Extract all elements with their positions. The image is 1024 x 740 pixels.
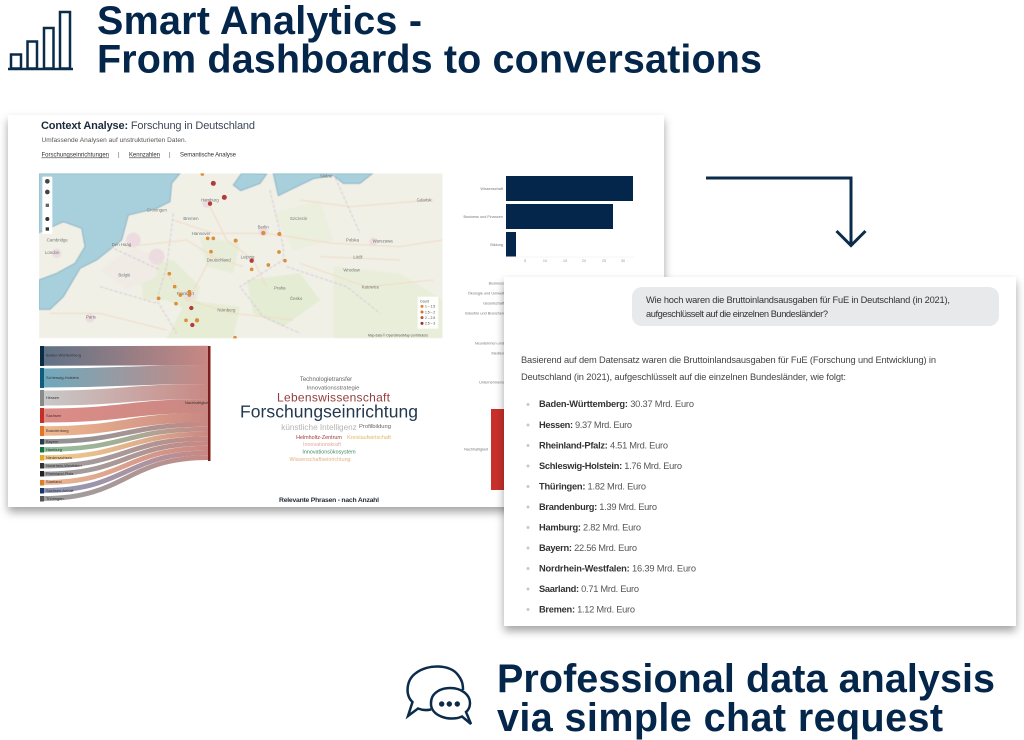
chat question bubble: Wie hoch waren die Bruttoinlandsausgaben für FuE in Deutschland (in 2021), <box>646 295 950 305</box>
word cloud: Helmholtz-Zentrum <box>296 435 342 441</box>
word cloud: Wissenschaftseinrichtung <box>289 457 351 463</box>
map labels: Nürnberg <box>217 308 236 313</box>
bar chart: lower, partly hidden: Neuntehmen und <box>475 342 504 346</box>
icon: chat bubbles <box>408 666 471 724</box>
map legend: 2 – 2.5 <box>425 316 435 320</box>
map legend: 2.5 – 3 <box>425 322 435 326</box>
dashboard heading <box>41 120 255 158</box>
map labels: Leipzig <box>241 255 255 260</box>
chat answer list: Bremen: 1.12 Mrd. Euro <box>539 604 635 614</box>
map labels: België <box>118 273 131 278</box>
map labels: Katowice <box>362 284 380 289</box>
dashboard heading: | <box>118 152 120 158</box>
map labels: Wrocław <box>343 268 361 273</box>
bar chart: lower, partly hidden: Gesellschaft <box>483 302 505 306</box>
word cloud: Innovationskraft <box>303 442 342 448</box>
sankey nodes <box>40 346 210 502</box>
bar chart: lower, partly hidden: Nachhaltigkeit <box>464 448 489 452</box>
chat answer list: Rheinland-Pfalz: 4.51 Mrd. Euro <box>539 440 668 450</box>
bar chart: lower, partly hidden: Industrie und Branchen <box>465 312 504 316</box>
dashboard heading: Umfassende Analysen auf unstrukturierten Daten. <box>42 137 187 144</box>
map legend: 1 – 1.5 <box>425 305 435 309</box>
word cloud: Lebenswissenschaft <box>277 390 391 404</box>
sankey labels: Bayern <box>46 439 58 444</box>
chat answer list: Nordrhein-Westfalen: 16.39 Mrd. Euro <box>539 564 696 574</box>
chat answer intro: Basierend auf dem Datensatz waren die Bruttoinlandsausgaben für FuE (Forschung und Entwicklung) in <box>521 355 936 365</box>
bar chart: top: Business und Finanzen <box>464 215 503 219</box>
map legend: Count <box>420 299 429 303</box>
chat answer list: Brandenburg: 1.39 Mrd. Euro <box>539 502 657 512</box>
title: Smart Analytics - <box>97 0 422 43</box>
map labels: Hannover <box>192 231 211 236</box>
chat answer intro: Deutschland (in 2021), aufgeschlüsselt auf die einzelnen Bundesländer, wie folgt: <box>521 372 846 382</box>
dashboard heading: Context Analyse: Forschung in Deutschland <box>41 120 255 132</box>
bar chart: top: 30 <box>621 259 625 263</box>
map labels: Cambridge <box>47 238 68 243</box>
word cloud caption: Relevante Phrasen - nach Anzahl <box>279 497 379 504</box>
sankey chart <box>40 346 210 502</box>
sankey labels: Niedersachsen <box>46 455 72 460</box>
sankey labels: Schleswig-Holstein <box>46 375 79 380</box>
sankey labels: Thüringen <box>46 496 64 501</box>
chat answer intro <box>521 355 936 382</box>
bar chart: top: Bildung <box>490 243 503 247</box>
word cloud: Innovationsstrategie <box>307 386 360 392</box>
bar chart: top: Wissenschaft <box>480 187 504 191</box>
word cloud: künstliche Intelligenz <box>281 423 357 432</box>
caption: Professional data analysis <box>497 657 995 701</box>
chat answer list <box>526 399 696 614</box>
map legend: 1.5 – 2 <box>425 310 435 314</box>
map labels: Berlin <box>258 224 269 229</box>
map labels: London <box>45 250 60 255</box>
bar chart: lower, partly hidden: Unternehmens <box>479 380 504 384</box>
chat question bubble: aufgeschlüsselt auf die einzelnen Bundesländer? <box>646 309 828 319</box>
sankey labels: Hamburg <box>46 447 62 452</box>
sankey labels: Saarland <box>46 479 62 484</box>
chat answer list: Thüringen: 1.82 Mrd. Euro <box>539 482 646 492</box>
word cloud <box>240 377 418 463</box>
map attribution: Map data © OpenStreetMap contributors <box>368 334 428 338</box>
bar chart: lower, partly hidden <box>464 282 505 490</box>
sankey labels: Brandenburg <box>46 428 68 433</box>
sankey labels <box>46 352 210 501</box>
sankey labels: Sachsen-Anhalt <box>46 488 74 493</box>
map labels: Praha <box>274 285 286 290</box>
dashboard heading: Kennzahlen <box>129 152 160 158</box>
map legend <box>418 297 438 329</box>
bar chart: lower, partly hidden: Ökologie und Umwelt <box>468 292 505 296</box>
bar chart: top: 5 <box>524 259 526 263</box>
chat answer list: Hamburg: 2.82 Mrd. Euro <box>539 522 641 532</box>
dashboard heading: | <box>169 152 171 158</box>
chat answer list: Bayern: 22.56 Mrd. Euro <box>539 543 637 553</box>
arrow <box>706 178 866 246</box>
bar chart: lower, partly hidden: Medien <box>492 352 504 356</box>
panel: dashboard screenshot <box>8 115 664 507</box>
map labels: Hamburg <box>201 198 219 203</box>
chat question bubble <box>632 287 999 326</box>
map <box>39 172 443 339</box>
chat answer list: Saarland: 0.71 Mrd. Euro <box>539 584 639 594</box>
sankey labels: Baden-Württemberg <box>46 352 81 358</box>
icon: bar chart <box>8 12 73 69</box>
chat answer list: Baden-Württemberg: 30.37 Mrd. Euro <box>539 399 694 409</box>
word cloud: Kreislaufwirtschaft <box>347 435 391 441</box>
title <box>97 0 762 82</box>
bar chart: lower, partly hidden: Business <box>489 282 504 286</box>
word cloud: Profilbildung <box>359 424 391 430</box>
map labels: Paris <box>86 314 96 319</box>
map labels: Frankfurt <box>177 291 195 296</box>
bar chart: top: 20 <box>582 259 586 263</box>
title: From dashboards to conversations <box>97 38 762 82</box>
sankey labels: Rheinland-Pfalz <box>46 471 74 476</box>
chat answer list: Schleswig-Holstein: 1.76 Mrd. Euro <box>539 461 682 471</box>
map labels: Den Haag <box>112 242 132 247</box>
sankey labels: Sachsen <box>46 413 61 418</box>
map labels <box>45 173 432 319</box>
map labels: Polska <box>346 238 360 243</box>
map labels: Skåne <box>320 173 333 178</box>
sankey labels: Nachhaltigkeit <box>185 400 210 405</box>
caption <box>497 657 995 740</box>
map labels: Groningen <box>147 208 167 213</box>
caption: via simple chat request <box>497 696 943 740</box>
word cloud: Forschungseinrichtung <box>240 402 418 422</box>
sankey labels: Hessen <box>46 395 59 400</box>
bar chart: top: 25 <box>602 259 606 263</box>
sankey labels: Nordrhein-Westfalen <box>46 463 82 468</box>
map labels: Deutschland <box>207 258 231 263</box>
chat answer list: Hessen: 9.37 Mrd. Euro <box>539 420 632 430</box>
bar chart: top <box>464 176 634 263</box>
map labels: Bremen <box>183 216 199 221</box>
map zoom controls <box>42 177 52 234</box>
map labels: Łódź <box>353 254 363 259</box>
map labels: Česko <box>290 296 303 301</box>
map labels: Warszawa <box>373 239 393 244</box>
map markers <box>157 172 287 339</box>
panel: chat response <box>504 277 1016 626</box>
map labels: Szczecin <box>290 216 308 221</box>
word cloud: Technologietransfer <box>300 377 352 383</box>
bar chart: top: 10 <box>543 259 547 263</box>
dashboard heading: Forschungseinrichtungen <box>42 152 109 158</box>
map labels: Gdańsk <box>417 198 432 203</box>
dashboard heading: Semantische Analyse <box>180 152 237 158</box>
word cloud: Innovationsökosystem <box>302 450 356 456</box>
bar chart: top: 15 <box>563 259 567 263</box>
